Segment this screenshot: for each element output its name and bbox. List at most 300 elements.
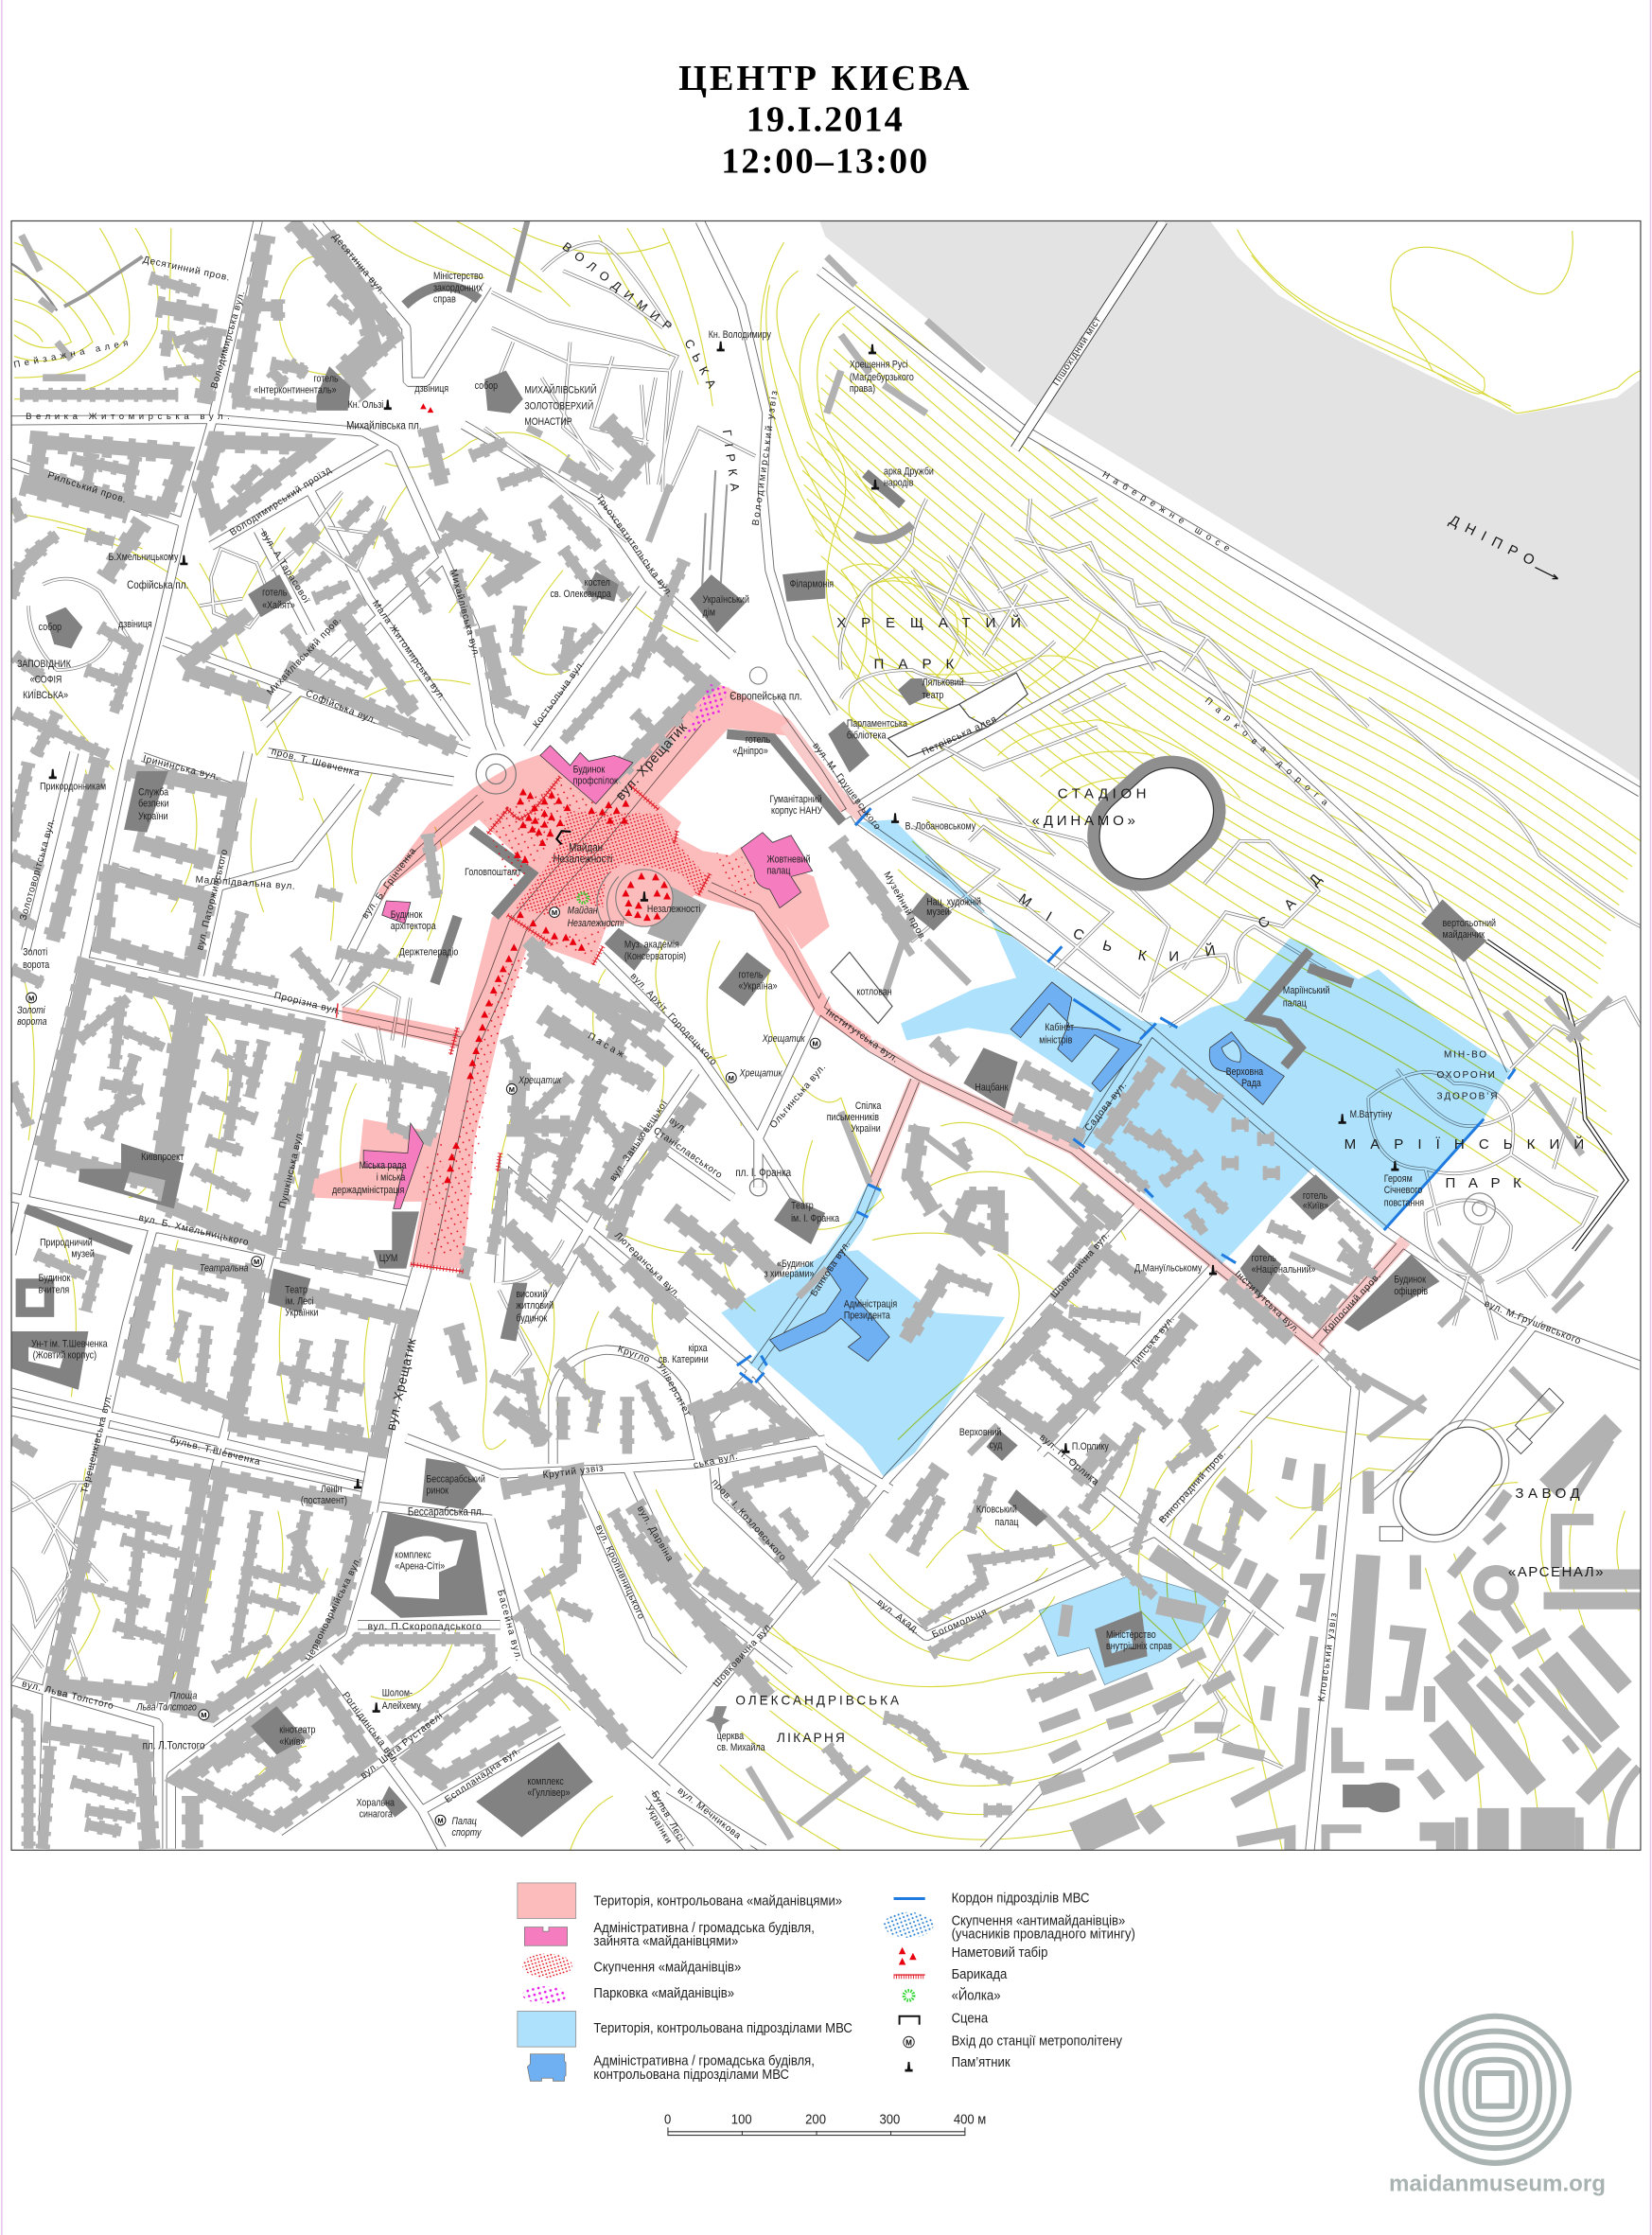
street names: Басейна вул. bbox=[495, 1589, 524, 1663]
street names: вул. Мечникова bbox=[676, 1786, 743, 1841]
building and square names: Театр bbox=[791, 1201, 814, 1212]
building and square names: «Гуллівер» bbox=[527, 1787, 571, 1799]
building and square names: готель bbox=[313, 374, 339, 385]
map frame bbox=[11, 220, 1641, 1850]
territory controlled by police (blue) bbox=[721, 819, 1511, 1685]
street names: Шовковична вул. bbox=[1049, 1230, 1113, 1300]
large area names: МІН-ВО bbox=[1444, 1050, 1488, 1061]
building and square names: житловий bbox=[516, 1300, 554, 1311]
building and square names: і міська bbox=[377, 1172, 406, 1184]
building and square names: суд bbox=[989, 1440, 1002, 1452]
building and square names: Спілка bbox=[855, 1100, 882, 1112]
legend: pink territory swatch bbox=[518, 1883, 576, 1919]
building and square names: ЗОЛОТОВЕРХИЙ bbox=[524, 399, 593, 413]
large area names: ДНІПРО bbox=[1447, 512, 1544, 572]
building and square names: Театр bbox=[285, 1285, 308, 1296]
legend: metro: М bbox=[905, 2038, 912, 2047]
river Dnipro bbox=[819, 220, 1641, 781]
building and square names: (Жовтий корпус) bbox=[33, 1350, 97, 1362]
occupied public buildings bbox=[363, 746, 813, 1208]
building and square names: «Київ» bbox=[1303, 1201, 1329, 1212]
street names: вул. bbox=[667, 1116, 690, 1135]
street names: Кріпосний пров. bbox=[1322, 1271, 1383, 1336]
building and square names: справ bbox=[433, 294, 456, 306]
building and square names: «Дніпро» bbox=[732, 746, 768, 757]
street names: Володимирська вул. bbox=[209, 290, 247, 390]
building and square names: ворота bbox=[17, 1016, 47, 1028]
building and square names: св. Катерини bbox=[659, 1354, 709, 1365]
building and square names: «Арена-Сіті» bbox=[395, 1561, 446, 1573]
metro letters bbox=[28, 908, 818, 1825]
building and square names: П.Орлику bbox=[1072, 1441, 1109, 1452]
street names: Інститутська вул. bbox=[824, 1007, 901, 1065]
building and square names: Кловський bbox=[976, 1505, 1017, 1516]
building and square names bbox=[17, 272, 1496, 1839]
building and square names: вертольотний bbox=[1443, 918, 1496, 929]
building and square names: ворота bbox=[23, 959, 50, 971]
street names: вул. Архіт. Городецького bbox=[628, 971, 719, 1068]
building and square names: ім. Лесі bbox=[285, 1296, 314, 1308]
large area names: СЬКА bbox=[681, 337, 723, 396]
building and square names: Служба bbox=[138, 787, 169, 799]
building and square names: Маріїнський bbox=[1283, 985, 1329, 996]
building and square names: ринок bbox=[426, 1486, 449, 1497]
building and square names: Хрещення Русі bbox=[850, 360, 908, 371]
metro letters: М bbox=[552, 908, 557, 917]
building and square names: безпеки bbox=[138, 799, 169, 810]
legend: tents bbox=[899, 1947, 917, 1965]
building and square names: Адміністрація bbox=[844, 1299, 897, 1311]
building and square names: костел bbox=[585, 577, 610, 589]
building and square names: Бессарабська пл. bbox=[408, 1505, 483, 1519]
street names bbox=[13, 232, 1583, 1846]
street names: бульв. Т.Шевченка bbox=[169, 1434, 262, 1468]
building and square names: повстання bbox=[1384, 1198, 1424, 1209]
street names: вул. М. Грушевського bbox=[810, 741, 883, 833]
building and square names: Д.Мануїльському bbox=[1134, 1263, 1202, 1275]
building and square names: Міська рада bbox=[360, 1160, 407, 1172]
building and square names: готель bbox=[1252, 1253, 1276, 1264]
building and square names: «Київ» bbox=[279, 1736, 306, 1748]
building and square names: Ун-т ім. Т.Шевченка bbox=[31, 1339, 108, 1350]
building and square names: Хоральна bbox=[357, 1798, 395, 1809]
street names: Володимирський проїзд bbox=[228, 465, 334, 538]
scale bar bbox=[664, 2111, 986, 2136]
building and square names: собор bbox=[475, 380, 499, 393]
building and square names: Незалежності bbox=[568, 918, 624, 929]
building and square names: Софійська пл. bbox=[127, 579, 188, 591]
street names: вул. Кропивницького bbox=[593, 1523, 646, 1622]
street names: Лютеранська вул. bbox=[612, 1230, 682, 1300]
street names: пров. І. Козловського bbox=[709, 1477, 788, 1563]
building and square names: Б.Хмельницькому bbox=[108, 552, 178, 563]
contour lines bbox=[11, 220, 1641, 1853]
street names: Пішохідний міст bbox=[1051, 315, 1104, 388]
street names: Велика Житомирська вул. bbox=[26, 412, 234, 422]
street names: вул. Хрещатик bbox=[613, 720, 691, 803]
large area names: МІСЬКИЙСАД bbox=[1015, 871, 1325, 964]
legend: tree bbox=[904, 1991, 914, 2000]
territory controlled by protesters (pink) bbox=[308, 681, 1405, 1351]
monuments bbox=[49, 342, 1398, 1713]
scale bar: 100 bbox=[731, 2111, 752, 2127]
street names: Михайлівський пров. bbox=[265, 614, 343, 697]
street names: Червоноармійська вул. bbox=[304, 1555, 364, 1663]
large area names: ЛІКАРНЯ bbox=[777, 1731, 847, 1745]
building and square names: ім. І. Франка bbox=[791, 1213, 840, 1224]
legend: stage bbox=[900, 2016, 920, 2025]
building and square names: Бессарабський bbox=[426, 1474, 485, 1486]
building and square names: Театральна bbox=[200, 1263, 249, 1275]
street names: вул. Шота Руставелі bbox=[359, 1711, 446, 1781]
street names: Музейний пров. bbox=[881, 871, 928, 944]
building and square names: готель bbox=[746, 734, 770, 746]
street names: пров. Т. Шевченка bbox=[271, 747, 360, 779]
building and square names: М.Ватутіну bbox=[1350, 1109, 1392, 1120]
building and square names: кінотеатр bbox=[279, 1725, 316, 1736]
building and square names: св. Михайла bbox=[717, 1742, 765, 1753]
building and square names: народів bbox=[884, 478, 913, 489]
large area names: ПАРК bbox=[873, 656, 968, 672]
building and square names: Площа bbox=[169, 1691, 198, 1702]
street names: Крутий узвіз bbox=[542, 1463, 605, 1481]
street names: Українки bbox=[643, 1804, 674, 1846]
scale bar: 300 bbox=[879, 2111, 900, 2127]
building and square names: палац bbox=[1283, 998, 1307, 1010]
title: 12:00–13:00 bbox=[721, 141, 929, 181]
building and square names: Незалежності bbox=[647, 904, 700, 915]
building and square names: вчителя bbox=[39, 1285, 69, 1296]
park paths bbox=[11, 220, 1641, 1768]
street names: Десятинний пров. bbox=[142, 255, 231, 284]
building and square names: Михайлівська пл. bbox=[346, 420, 421, 432]
scale bar: 400 м bbox=[954, 2111, 986, 2127]
metro letters: М bbox=[201, 1711, 207, 1719]
large area names: ГІРКА bbox=[720, 429, 744, 499]
legend: left labels: контрольована підрозділами МВС bbox=[593, 2066, 789, 2082]
metro letters: М bbox=[28, 994, 34, 1002]
legend bbox=[518, 1883, 1135, 2082]
metro letters: М bbox=[254, 1258, 259, 1266]
large area names: ВОЛОДИМИР bbox=[560, 239, 680, 338]
building and square names: майданчик bbox=[1443, 929, 1485, 941]
legend: left labels: Адміністративна / громадська будівля, bbox=[593, 2052, 815, 2068]
building and square names: Нац. художній bbox=[926, 897, 981, 908]
street names: вул. П. Орлика bbox=[1037, 1433, 1101, 1488]
legend: right labels: Барикада bbox=[952, 1965, 1007, 1981]
large area names: СТАДІОН bbox=[1058, 786, 1151, 802]
street names: Терещенківська вул. bbox=[79, 1392, 114, 1494]
building and square names: МИХАЙЛІВСЬКИЙ bbox=[524, 384, 597, 396]
building and square names: Льва Толстого bbox=[136, 1702, 197, 1714]
legend: right labels: Наметовий табір bbox=[952, 1944, 1048, 1960]
building and square names: Героям bbox=[1384, 1173, 1413, 1185]
large area names bbox=[560, 239, 1605, 1745]
building and square names: дім bbox=[703, 607, 715, 619]
building and square names: Муз. академія bbox=[624, 940, 679, 951]
stage bbox=[556, 831, 571, 844]
legend: occupied building swatch bbox=[524, 1927, 568, 1945]
building and square names: Київпроект bbox=[141, 1152, 185, 1163]
street names: вул. М.Грушевського bbox=[1483, 1298, 1583, 1347]
building and square names: палац bbox=[766, 866, 791, 877]
street names: Десятинна вул. bbox=[330, 232, 387, 297]
street names: вул. А.Тарасової bbox=[258, 529, 311, 606]
large area names: «ДИНАМО» bbox=[1032, 813, 1139, 829]
museum logo bbox=[1389, 2016, 1606, 2196]
road network bbox=[11, 220, 1641, 1850]
building and square names: Золоті bbox=[23, 947, 47, 959]
scale bar: 200 bbox=[805, 2111, 826, 2127]
building and square names: Рада bbox=[1241, 1078, 1261, 1089]
legend: left labels: Територія, контрольована підрозділами МВС bbox=[593, 2019, 852, 2035]
building and square names: письменників bbox=[827, 1112, 879, 1123]
police controlled buildings bbox=[769, 982, 1284, 1362]
large area names: МАРІЇНСЬКИЙ bbox=[1344, 1135, 1598, 1153]
building and square names: Президента bbox=[844, 1311, 890, 1322]
building and square names: Будинок bbox=[391, 909, 423, 921]
street names: Садова вул. bbox=[1083, 1080, 1130, 1134]
street names: вул. Заньковецької bbox=[608, 1099, 670, 1183]
legend: blue territory swatch bbox=[518, 2011, 576, 2047]
street names: Липська вул. bbox=[1129, 1313, 1177, 1370]
building and square names: корпус НАНУ bbox=[771, 805, 823, 817]
building and square names: «Національний» bbox=[1252, 1264, 1316, 1276]
building and square names: Держтелерадіо bbox=[399, 947, 459, 959]
street names: Кловський узвіз bbox=[1317, 1610, 1340, 1702]
building and square names: дзвіниця bbox=[118, 619, 152, 630]
street names: Ірининська вул. bbox=[142, 754, 220, 783]
building and square names: Будинок bbox=[573, 765, 606, 776]
building and square names: Алейхему bbox=[382, 1700, 421, 1712]
legend: monument bbox=[905, 2062, 913, 2072]
large area names: ЗДОРОВ’Я bbox=[1437, 1091, 1499, 1101]
building and square names: офіцерів bbox=[1394, 1286, 1428, 1297]
street names: Есплланадна вул. bbox=[443, 1746, 523, 1805]
building and square names: «Будинок bbox=[777, 1258, 814, 1270]
legend: cordon bbox=[894, 1897, 925, 1899]
Independence Square crowd bbox=[422, 781, 755, 1255]
legend: police building swatch bbox=[527, 2054, 566, 2081]
building and square names: (постамент) bbox=[301, 1495, 347, 1507]
street names: Інститутська вул. bbox=[1233, 1269, 1302, 1336]
building and square names: дзвіниця bbox=[414, 384, 448, 396]
building and square names: права) bbox=[850, 384, 875, 396]
building and square names: комплекс bbox=[527, 1776, 564, 1787]
street names: вул. Льва Толстого bbox=[21, 1679, 115, 1712]
building and square names: архітектора bbox=[391, 921, 436, 932]
building and square names: закордонних bbox=[433, 283, 483, 294]
legend: left labels: Територія, контрольована «майданівцями» bbox=[593, 1892, 842, 1908]
street names: Банкова вул. bbox=[809, 1239, 852, 1298]
building and square names: Кн. Володимиру bbox=[709, 329, 771, 341]
street names: Мала Житомирська вул. bbox=[370, 599, 448, 704]
building and square names: Верховний bbox=[959, 1427, 1001, 1438]
building and square names: Філармонія bbox=[790, 579, 834, 590]
street names: Бульв. Лесі bbox=[649, 1789, 687, 1844]
building and square names: (Консерваторія) bbox=[624, 951, 686, 962]
street names: Станіславського bbox=[651, 1126, 725, 1181]
building and square names: Хрещатик bbox=[739, 1068, 782, 1080]
building and square names: котлован bbox=[856, 987, 892, 998]
legend: right labels: Вхід до станції метрополітену bbox=[952, 2033, 1123, 2049]
building and square names: Природничий bbox=[40, 1238, 93, 1249]
building and square names: Головпоштамт bbox=[465, 867, 521, 878]
building and square names: спорту bbox=[452, 1827, 482, 1839]
building and square names: Хрещатик bbox=[518, 1075, 561, 1086]
street names: Рогнідинська вул. bbox=[340, 1690, 401, 1768]
legend: left labels: Адміністративна / громадська будівля, bbox=[593, 1919, 815, 1935]
building and square names: «Інтерконтиненталь» bbox=[254, 385, 337, 396]
building and square names: Верховна bbox=[1226, 1066, 1264, 1078]
street names: Рильський пров. bbox=[46, 470, 128, 505]
building and square names: кірха bbox=[689, 1343, 708, 1354]
street names: Богомольця bbox=[930, 1607, 989, 1641]
building and square names: ЗАПОВІДНИК bbox=[17, 659, 71, 670]
building and square names: св. Олександра bbox=[550, 589, 611, 600]
building and square names: Золоті bbox=[17, 1005, 45, 1016]
legend: protesters crowd bbox=[522, 1953, 572, 1978]
building and square names: України bbox=[138, 811, 167, 822]
building and square names: музей bbox=[926, 906, 950, 918]
legend: parking bbox=[522, 1986, 568, 2003]
building and square names: собор bbox=[39, 622, 62, 633]
street names: Ольгинська вул. bbox=[768, 1062, 829, 1131]
arrow: river flow bbox=[1535, 568, 1558, 579]
street names: Виноградний пров. bbox=[1157, 1448, 1229, 1525]
legend: right labels: Сцена bbox=[952, 2010, 988, 2026]
street names: ська вул. bbox=[693, 1452, 739, 1471]
metro letters: М bbox=[509, 1085, 515, 1094]
building and square names: готель bbox=[738, 970, 764, 981]
building and square names: арка Дружби bbox=[884, 466, 934, 478]
building and square names: Кн. Ользі bbox=[348, 399, 383, 411]
legend: right labels: (учасників провладного мітингу) bbox=[952, 1926, 1135, 1942]
legend: right labels: Кордон підрозділів МВС bbox=[952, 1889, 1089, 1905]
legend: metro bbox=[904, 2036, 914, 2048]
building and square names: «Хайят» bbox=[262, 600, 295, 612]
title bbox=[678, 59, 972, 181]
metro letters: М bbox=[437, 1817, 444, 1825]
building and square names: з химерами» bbox=[764, 1269, 815, 1280]
large area names: ПАРК bbox=[1446, 1175, 1534, 1191]
metro entrances bbox=[26, 907, 820, 1825]
street names: Володимирський узвіз bbox=[751, 388, 781, 526]
building and square names: Будинок bbox=[1394, 1275, 1427, 1286]
legend: left labels bbox=[593, 1892, 852, 2082]
tent camp markers bbox=[420, 403, 671, 1183]
street names: Пушкінська вул. bbox=[277, 1129, 306, 1209]
street names: вул. Дарвіна bbox=[635, 1505, 676, 1564]
building and square names: палац bbox=[995, 1517, 1019, 1528]
building and square names: Європейська пл. bbox=[729, 691, 802, 703]
police cordons bbox=[737, 808, 1515, 1382]
metro letters: М bbox=[729, 1074, 734, 1082]
street names: вул. Б. Грінченка bbox=[360, 846, 419, 921]
large area names: «АРСЕНАЛ» bbox=[1508, 1564, 1605, 1580]
building and square names: пл. І. Франка bbox=[735, 1167, 792, 1179]
buildings bbox=[11, 220, 1641, 1850]
building and square names: Палац bbox=[452, 1816, 477, 1827]
building and square names: синагога bbox=[360, 1809, 393, 1821]
building and square names: театр bbox=[923, 690, 944, 701]
building and square names: Ленін bbox=[321, 1484, 343, 1495]
street names: вул. Патоpжинського bbox=[195, 848, 230, 951]
building and square names: Майдан bbox=[568, 906, 598, 917]
title: ЦЕНТР КИЄВА bbox=[678, 59, 972, 98]
building and square names: пл. Л.Толстого bbox=[143, 1739, 205, 1752]
street names: Золотоворітська вул. bbox=[18, 818, 58, 922]
scale bar: 0 bbox=[664, 2111, 671, 2127]
building and square names: комплекс bbox=[395, 1550, 431, 1561]
street names: вул. Хрещатик bbox=[384, 1336, 419, 1432]
building and square names: «Україна» bbox=[738, 981, 778, 993]
building and square names: Міністерство bbox=[1106, 1629, 1156, 1641]
legend: right labels: Пам’ятник bbox=[952, 2053, 1011, 2069]
building and square names: Шолом- bbox=[382, 1688, 413, 1699]
building and square names: Ляльковий bbox=[923, 678, 964, 689]
building and square names: Хрещатик bbox=[762, 1033, 805, 1045]
building and square names: Будинок bbox=[39, 1273, 71, 1285]
parking of protesters bbox=[681, 684, 729, 741]
building and square names: «СОФІЯ bbox=[30, 675, 62, 686]
large area names: ОХОРОНИ bbox=[1437, 1070, 1497, 1081]
street names: вул. Б. Хмельницького bbox=[137, 1213, 250, 1248]
building and square names: Нацбанк bbox=[975, 1082, 1009, 1094]
legend: barricade bbox=[894, 1975, 925, 1977]
street names: вул. Акад. bbox=[875, 1597, 922, 1636]
street names: Кругло bbox=[616, 1345, 651, 1365]
street names: Прорізна вул. bbox=[273, 991, 342, 1017]
street names: Малопідвальна вул. bbox=[195, 874, 296, 892]
metro letters: М bbox=[813, 1040, 818, 1048]
title: 19.I.2014 bbox=[747, 100, 905, 140]
street names: Набережне шосе bbox=[1100, 469, 1237, 557]
legend: left labels: Парковка «майданівців» bbox=[593, 1984, 734, 2000]
legend: right labels: Скупчення «антимайданівців» bbox=[952, 1911, 1125, 1928]
building and square names: Парламентська bbox=[847, 719, 907, 730]
street names: університет bbox=[656, 1362, 693, 1418]
building and square names: музей bbox=[71, 1249, 95, 1260]
building and square names: України bbox=[851, 1123, 881, 1135]
street names: Костьольна вул. bbox=[531, 659, 588, 730]
building and square names: бібліотека bbox=[847, 730, 887, 742]
building and square names: Український bbox=[703, 594, 749, 606]
large area names: ОЛЕКСАНДРІВСЬКА bbox=[735, 1694, 902, 1708]
legend: anti-protesters crowd bbox=[884, 1912, 934, 1938]
museum logo: maidanmuseum.org bbox=[1389, 2171, 1606, 2196]
street names: Петрівська алея bbox=[921, 714, 999, 758]
legend: left labels: Скупчення «майданівців» bbox=[593, 1958, 741, 1975]
building and square names: Українки bbox=[285, 1308, 319, 1319]
New Year tree bbox=[578, 893, 588, 903]
barricades bbox=[337, 777, 710, 1272]
building and square names: профспілок bbox=[573, 776, 619, 787]
building and square names: високий bbox=[516, 1289, 547, 1300]
legend: left labels: зайнята «майданівцями» bbox=[593, 1932, 738, 1948]
street names: Софійська вул. bbox=[304, 688, 378, 727]
building and square names: Незалежності bbox=[554, 854, 612, 866]
building and square names: ЦУМ bbox=[379, 1253, 397, 1264]
legend: right labels bbox=[952, 1889, 1135, 2069]
street names: Паркова дорога bbox=[1203, 695, 1335, 813]
map panel bbox=[11, 220, 1641, 1853]
building and square names: Прикордонникам bbox=[40, 782, 106, 793]
building and square names: внутрішніх справ bbox=[1106, 1641, 1172, 1652]
building and square names: Гуманітарний bbox=[769, 794, 822, 805]
building and square names: готель bbox=[1303, 1190, 1327, 1202]
street names: Шовковична вул. bbox=[712, 1620, 776, 1690]
